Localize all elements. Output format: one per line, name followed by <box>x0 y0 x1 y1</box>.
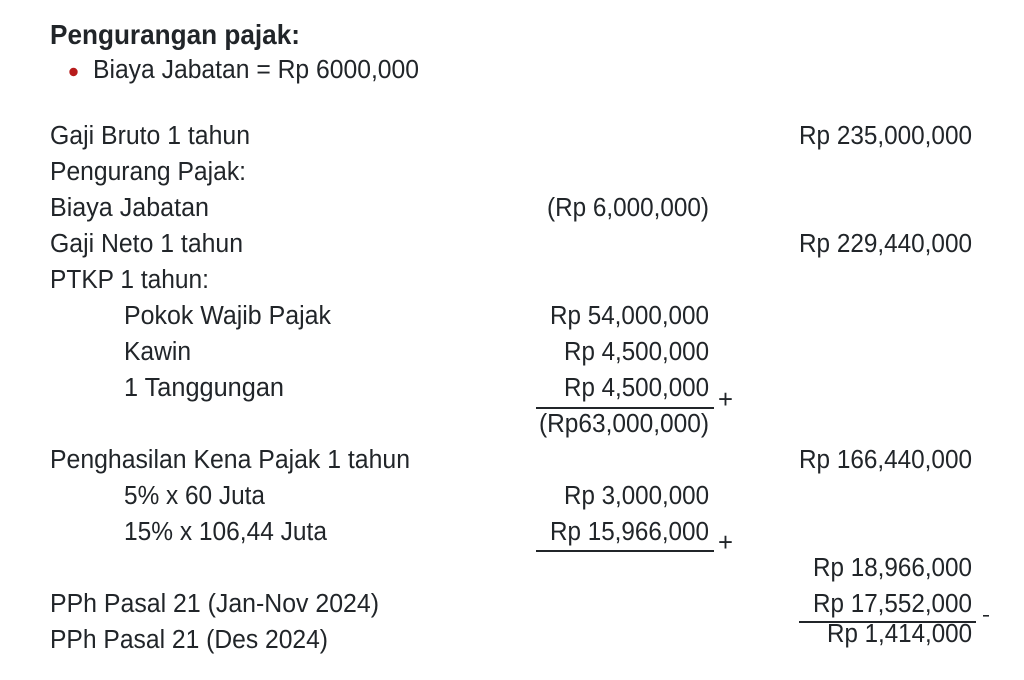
row: tax Jan-Nov <box>50 590 972 618</box>
subtraction line with minus sign <box>799 615 989 623</box>
row: gross salary <box>50 122 972 150</box>
panel: tax calculation table <box>50 122 989 654</box>
row: dependent allowance: Rp 4,500,000 <box>564 374 709 402</box>
row: married allowance: Rp 4,500,000 <box>564 338 709 366</box>
row: taxable income <box>50 446 972 474</box>
row: taxpayer allowance: Pokok Wajib Pajak <box>124 302 331 330</box>
row: PTKP total: (Rp63,000,000) <box>539 410 709 438</box>
row: net salary: Gaji Neto 1 tahun <box>50 230 243 258</box>
row: PTKP label: PTKP 1 tahun: <box>50 266 209 294</box>
row: married allowance <box>124 338 709 366</box>
row: job expense: (Rp 6,000,000) <box>547 194 709 222</box>
row: 5 percent bracket: 5% x 60 Juta <box>124 482 266 510</box>
bullet: deduction item <box>69 56 419 84</box>
row: taxable income: Rp 166,440,000 <box>799 446 972 474</box>
row: taxpayer allowance: Rp 54,000,000 <box>550 302 709 330</box>
row: 5 percent bracket: Rp 3,000,000 <box>564 482 709 510</box>
row: married allowance: Kawin <box>124 338 191 366</box>
row: 5 percent bracket <box>124 482 709 510</box>
row: 15 percent bracket: 15% x 106,44 Juta <box>124 518 328 546</box>
row: gross salary: Rp 235,000,000 <box>799 122 972 150</box>
text: job expense: Biaya Jabatan = Rp 6000,000 <box>93 56 419 84</box>
row: tax Jan-Nov: Rp 17,552,000 <box>813 590 972 618</box>
sum line with plus sign: + <box>718 386 733 414</box>
row: gross salary: Gaji Bruto 1 tahun <box>50 122 250 150</box>
row: tax December: Rp 1,414,000 <box>827 620 972 648</box>
row: deductions label: Pengurang Pajak: <box>50 158 246 186</box>
row: annual tax total: Rp 18,966,000 <box>813 554 972 582</box>
row: tax December: PPh Pasal 21 (Des 2024) <box>50 626 328 654</box>
row: tax December <box>50 620 972 654</box>
row: job expense <box>50 194 709 222</box>
row: net salary: Rp 229,440,000 <box>799 230 972 258</box>
row: taxable income: Penghasilan Kena Pajak 1 tahun <box>50 446 410 474</box>
row: net salary <box>50 230 972 258</box>
row: 15 percent bracket <box>124 518 709 546</box>
heading: tax deductions: Pengurangan pajak: <box>50 19 300 50</box>
row: dependent allowance: 1 Tanggungan <box>124 374 284 402</box>
row: dependent allowance <box>124 374 709 402</box>
row: taxpayer allowance <box>124 302 709 330</box>
row: job expense: Biaya Jabatan <box>50 194 209 222</box>
sum line with plus sign: + <box>718 529 733 557</box>
row: tax Jan-Nov: PPh Pasal 21 (Jan-Nov 2024) <box>50 590 379 618</box>
row: 15 percent bracket: Rp 15,966,000 <box>550 518 709 546</box>
icon: red bullet <box>69 68 78 76</box>
